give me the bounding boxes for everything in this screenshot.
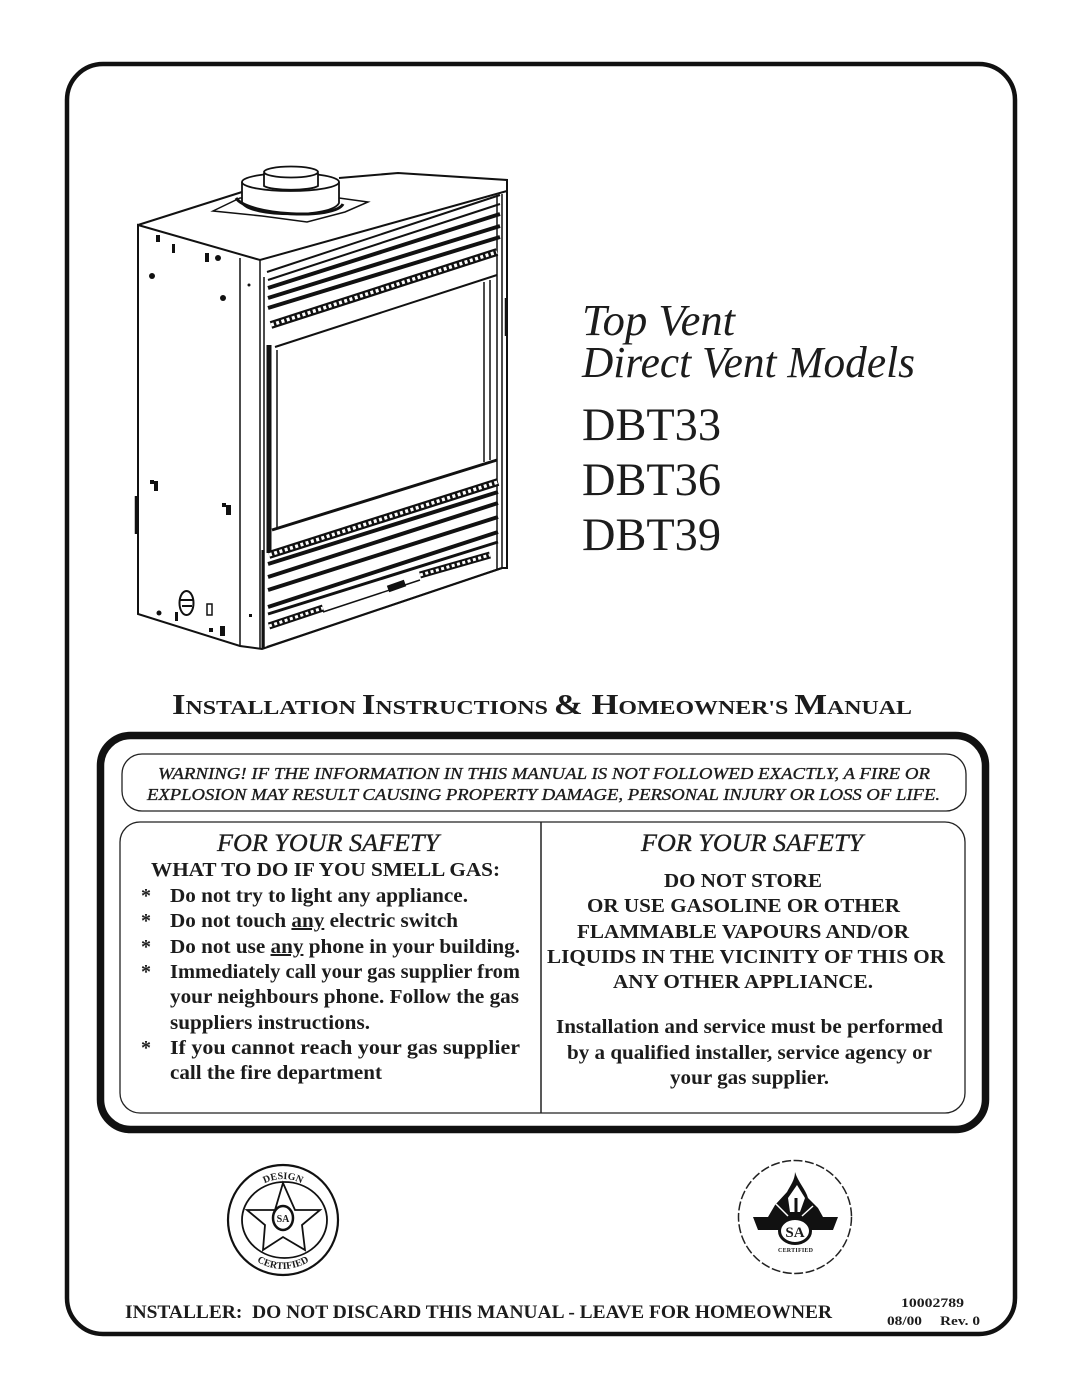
document number xyxy=(887,1295,980,1328)
seal: design certified star: SA xyxy=(277,1214,290,1225)
title: Top Vent xyxy=(582,296,737,345)
left safety column: WHAT TO DO IF YOU SMELL GAS: xyxy=(151,859,500,881)
lower louvres xyxy=(267,460,502,647)
title xyxy=(581,296,915,387)
side panel fasteners xyxy=(149,235,252,636)
subtitle: INSTALLATION INSTRUCTIONS & H OMEOWNER'S M ANUAL xyxy=(172,689,912,721)
right safety column xyxy=(547,830,946,1089)
left safety column: call the fire department xyxy=(170,1062,382,1084)
page frame xyxy=(67,64,1015,1334)
left safety column: your neighbours phone. Follow the gas xyxy=(170,986,519,1008)
right safety column: DO NOT STORE xyxy=(664,870,822,892)
seal: CSA flame: CERTIFIED xyxy=(778,1248,814,1254)
left safety column: Do not touch any electric switch xyxy=(170,910,458,932)
right safety column: ANY OTHER APPLIANCE. xyxy=(613,971,873,993)
left safety column: * xyxy=(141,936,151,958)
warning box: EXPLOSION MAY RESULT CAUSING PROPERTY DAMAGE, PERSONAL INJURY OR LOSS OF LIFE. xyxy=(146,785,940,804)
fireplace top and side outline xyxy=(136,173,507,649)
right safety column: FOR YOUR SAFETY xyxy=(640,830,866,857)
left safety column: * xyxy=(141,1037,151,1059)
right safety column: LIQUIDS IN THE VICINITY OF THIS OR xyxy=(547,946,946,968)
model numbers: DBT33 xyxy=(582,399,721,451)
right safety column: OR USE GASOLINE OR OTHER xyxy=(587,895,901,917)
left safety column: FOR YOUR SAFETY xyxy=(216,830,442,857)
document number: 10002789 xyxy=(901,1295,965,1310)
right safety column: by a qualified installer, service agency or xyxy=(567,1042,932,1064)
safety box xyxy=(120,822,965,1113)
left safety column: * xyxy=(141,885,151,907)
seal: CSA flame xyxy=(738,1160,852,1274)
right safety column: your gas supplier. xyxy=(670,1067,829,1089)
title: Direct Vent Models xyxy=(581,338,915,387)
seal: CSA flame: SA xyxy=(785,1225,805,1241)
warning box xyxy=(122,754,966,811)
seal: design certified star: DESIGN xyxy=(262,1172,304,1184)
left safety column: Immediately call your gas supplier from xyxy=(170,961,520,983)
left safety column: Do not use any phone in your building. xyxy=(170,936,520,958)
right safety column: FLAMMABLE VAPOURS AND/OR xyxy=(577,921,910,943)
warning and safety panel xyxy=(100,736,986,1130)
footer notice: INSTALLER: DO NOT DISCARD THIS MANUAL - LEAVE FOR HOMEOWNER xyxy=(125,1303,833,1323)
model numbers xyxy=(582,399,721,561)
seal: design certified star xyxy=(226,1164,340,1276)
left safety column: suppliers instructions. xyxy=(170,1012,370,1034)
left safety column: If you cannot reach your gas supplier xyxy=(170,1037,520,1059)
warning box: WARNING! IF THE INFORMATION IN THIS MANUAL IS NOT FOLLOWED EXACTLY, A FIRE OR xyxy=(158,764,931,783)
upper louvres xyxy=(267,195,500,347)
left safety column xyxy=(141,822,541,1113)
vent collar and flue xyxy=(213,166,368,222)
document number: 08/00 xyxy=(887,1313,922,1328)
left safety column: * xyxy=(141,910,151,932)
model numbers: DBT36 xyxy=(582,454,721,506)
model numbers: DBT39 xyxy=(582,509,721,561)
right safety column: Installation and service must be performed xyxy=(556,1016,943,1038)
illustration: top vent fireplace xyxy=(136,166,507,649)
document number: Rev. 0 xyxy=(940,1313,980,1328)
left safety column: Do not try to light any appliance. xyxy=(170,885,468,907)
seal: design certified star: CERTIFIED xyxy=(258,1257,308,1269)
left safety column: * xyxy=(141,961,151,983)
